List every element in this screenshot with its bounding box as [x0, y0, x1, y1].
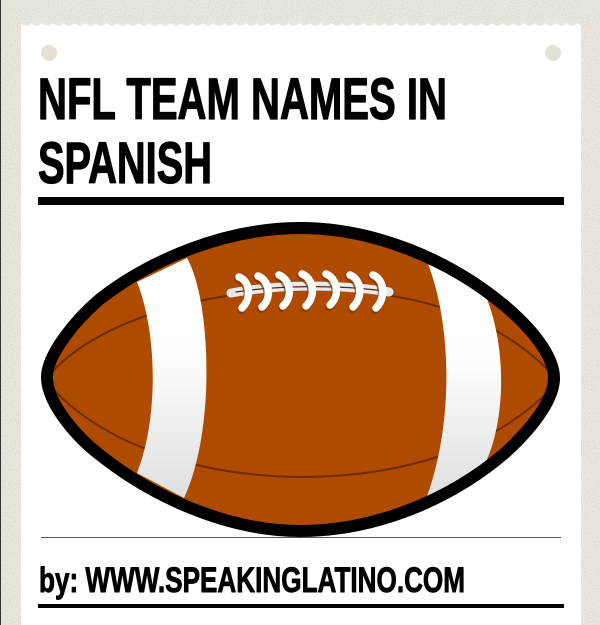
thin divider under illustration [41, 537, 561, 538]
title underline rule [38, 197, 564, 205]
icon: right pin hole [545, 45, 561, 61]
title: SPANISH [38, 131, 212, 196]
football body [47, 228, 554, 531]
title [38, 67, 447, 196]
football laces [231, 274, 389, 310]
byline: by: WWW.SPEAKINGLATINO.COM [39, 561, 465, 600]
illustration: american football [47, 228, 554, 531]
byline underline rule [38, 604, 564, 608]
football outline [47, 228, 554, 531]
left white stripe [137, 258, 207, 498]
icon: left pin hole [41, 45, 57, 61]
football seams [52, 290, 550, 477]
right white stripe [426, 261, 501, 499]
